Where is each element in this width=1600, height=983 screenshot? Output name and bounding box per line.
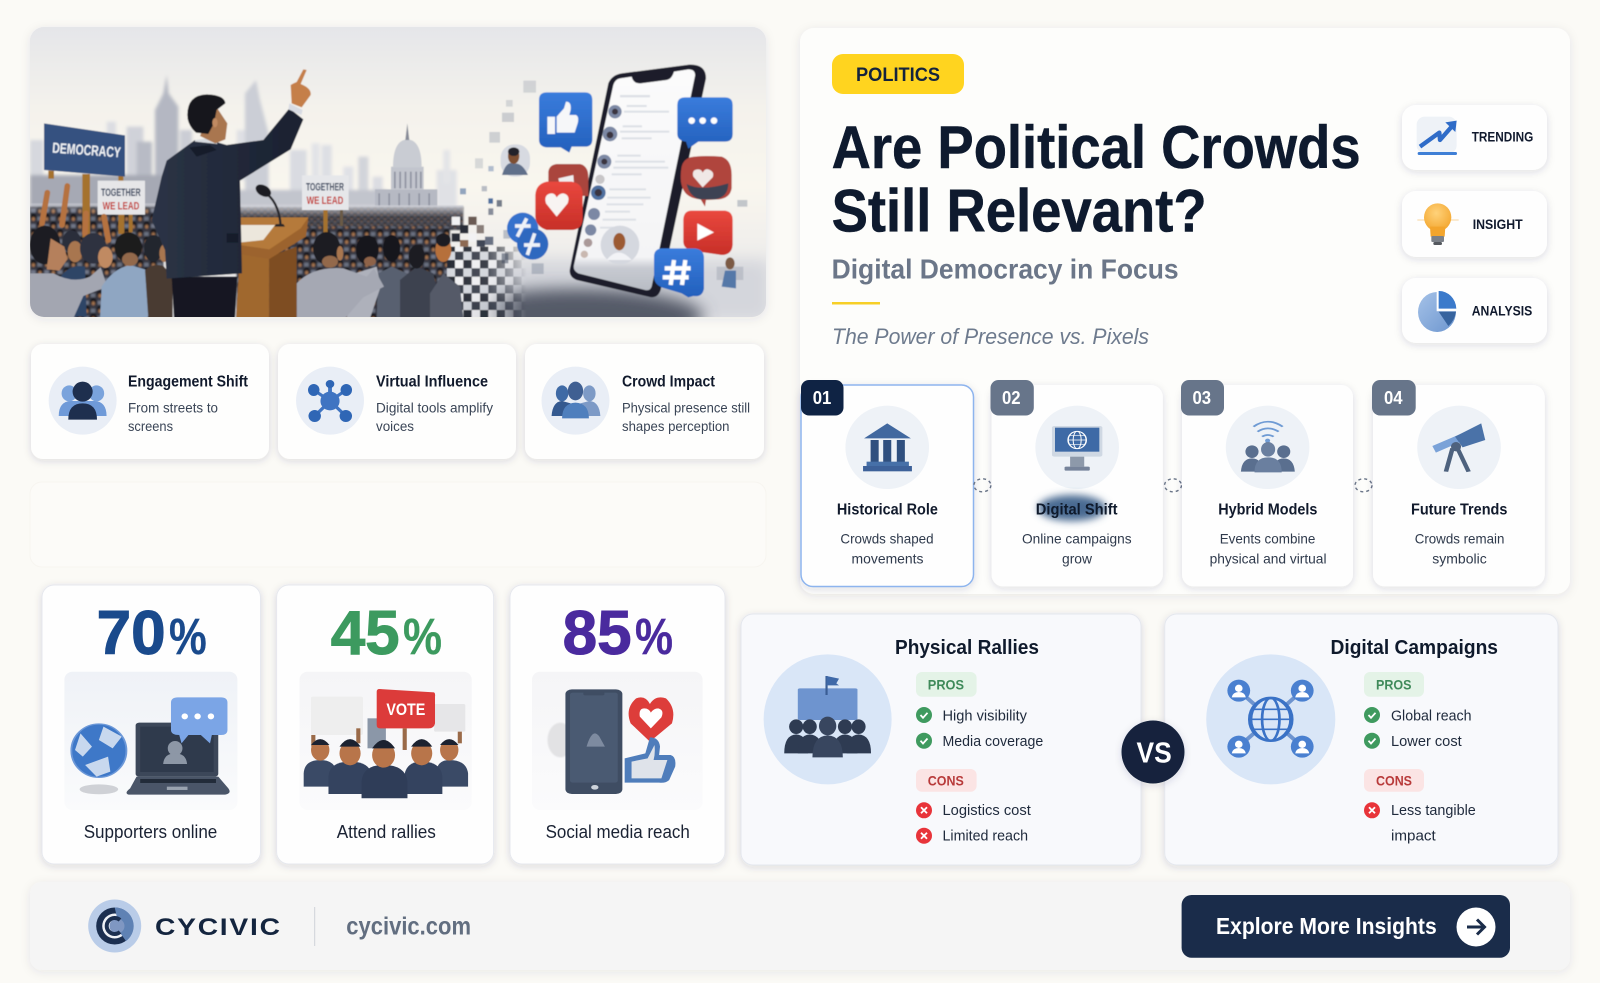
button: explore more insights: Explore More Insights [1216, 913, 1437, 939]
stat card: 85% social media reach [510, 585, 725, 864]
distant figure [717, 257, 743, 288]
info card: crowd impact: Physical presence still [622, 400, 750, 416]
social icon: avatar bubble [501, 144, 530, 177]
icon: connected audience [1226, 406, 1309, 489]
tagline: The Power of Presence vs. Pixels [832, 324, 1149, 349]
stat card: 85% social media reach: Social media reach [546, 822, 690, 842]
value [331, 599, 442, 668]
social icon: dim heart [681, 156, 732, 207]
raised arms [42, 186, 108, 240]
pros and cons list: High visibility [942, 708, 1027, 724]
placard: together we lead [98, 181, 145, 234]
step 1: historical role: Crowds shaped [840, 530, 934, 546]
icon: group [542, 367, 609, 435]
step 3: hybrid models [1181, 380, 1353, 586]
icon: telescope [1417, 406, 1501, 489]
speaker [152, 69, 311, 318]
comparison card: digital campaigns: Digital Campaigns [1330, 637, 1498, 659]
foreground crowd left [30, 226, 173, 318]
footer bar [30, 882, 1570, 970]
icon: light bulb [1417, 203, 1459, 245]
foreground crowd right [297, 232, 463, 318]
tag card: analysis [1402, 278, 1547, 343]
step 2: digital shift: grow [1062, 550, 1093, 566]
step 1: historical role: 01 [813, 388, 831, 408]
info card: crowd impact: shapes perception [622, 418, 730, 434]
panel: title and timeline [800, 28, 1570, 594]
step 2: digital shift: Digital Shift [1036, 502, 1118, 518]
button: explore more insights [1182, 895, 1510, 958]
connector [974, 479, 991, 492]
icon: monitor with globe [1035, 406, 1119, 489]
icon: pie chart [1418, 291, 1456, 332]
checker pixels [447, 247, 527, 320]
scattered pixels [460, 81, 747, 274]
placard: together we lead: TOGETHER [101, 187, 141, 199]
value: % [635, 608, 673, 665]
info card: crowd impact [525, 344, 764, 459]
placard: together we lead (right): TOGETHER [306, 182, 344, 194]
social icon: hearts [535, 164, 588, 230]
image: laptop and globe [64, 672, 237, 810]
info card: crowd impact: Crowd Impact [622, 374, 716, 390]
subtitle: Digital Democracy in Focus [832, 254, 1179, 284]
icon: people [49, 367, 117, 435]
social icon: play [683, 211, 733, 255]
logo mark [88, 900, 141, 952]
comparison card: physical rallies: Physical Rallies [895, 637, 1039, 659]
brand name: CYCIVIC [155, 914, 282, 941]
step 1: historical role: Historical Role [837, 502, 938, 518]
social icon: chat [677, 97, 733, 149]
pros and cons list: Logistics cost [942, 802, 1032, 819]
connector [1355, 479, 1372, 492]
info card: engagement shift [31, 344, 269, 459]
social icon: hash [654, 248, 704, 297]
value [563, 599, 673, 668]
phone [570, 65, 706, 297]
value: % [403, 608, 442, 665]
empty placeholder panel [30, 482, 766, 567]
step 2: digital shift: Online campaigns [1022, 530, 1132, 546]
step 2: digital shift [990, 380, 1163, 586]
hero illustration: speaker before crowd dissolving into phone and social icons [27, 23, 770, 345]
versus badge [1122, 720, 1184, 784]
pros and cons list [1364, 672, 1476, 845]
stat card: 45% attend rallies [277, 585, 494, 864]
comparison card: physical rallies [741, 614, 1141, 865]
value [97, 599, 207, 668]
pros and cons list: Media coverage [942, 733, 1043, 750]
icon: trending arrow [1417, 117, 1457, 155]
pros and cons list: CONS [928, 772, 964, 788]
pros and cons list: PROS [1376, 676, 1412, 692]
image: protesters with vote sign [300, 672, 472, 810]
info card: engagement shift: Engagement Shift [128, 374, 249, 390]
icon: network [296, 367, 364, 435]
info card: virtual influence: Digital tools amplify [376, 400, 493, 416]
placard: democracy: DEMOCRACY [52, 141, 121, 161]
pros and cons list: impact [1391, 828, 1437, 845]
step 4: future trends: 04 [1384, 388, 1403, 408]
image: protesters with vote sign: VOTE [386, 701, 425, 719]
pros and cons list: CONS [1376, 772, 1412, 788]
step 3: hybrid models: Hybrid Models [1218, 502, 1317, 518]
social icon: thumbs up [539, 92, 592, 153]
value: % [169, 608, 207, 665]
placard: democracy [44, 123, 125, 237]
step 1: historical role [801, 380, 974, 586]
stat card: 70% supporters online: Supporters online [84, 822, 217, 842]
step 4: future trends [1372, 380, 1545, 586]
tag card: trending [1402, 105, 1547, 170]
step 4: future trends: Future Trends [1411, 502, 1507, 518]
value: 85 [563, 599, 632, 668]
pros and cons list: Less tangible [1391, 802, 1476, 819]
right part of the hero [460, 65, 747, 297]
tag card: trending: TRENDING [1472, 130, 1533, 144]
info card: engagement shift: From streets to [128, 400, 218, 416]
step 4: future trends: Crowds remain [1415, 530, 1504, 546]
icon: institution [845, 406, 929, 489]
podium [236, 182, 308, 318]
pros and cons list: Global reach [1391, 708, 1472, 724]
tag card: insight: INSIGHT [1473, 217, 1523, 232]
city skyline [30, 75, 457, 215]
tag card: analysis: ANALYSIS [1472, 304, 1532, 318]
tag: politics [832, 54, 964, 94]
far and near crowd [30, 207, 463, 320]
tag: politics: POLITICS [856, 65, 940, 86]
info card: virtual influence [278, 344, 516, 459]
placard: together we lead (right): WE LEAD [307, 195, 344, 207]
info card: virtual influence: Virtual Influence [376, 374, 488, 390]
image: phone with reactions [532, 672, 703, 810]
stat card: 70% supporters online [42, 585, 260, 864]
title [832, 114, 1361, 244]
placard: together we lead: WE LEAD [103, 200, 140, 212]
step 3: hybrid models: 03 [1192, 388, 1211, 408]
step 2: digital shift: 02 [1002, 388, 1021, 408]
pros and cons list [916, 672, 1043, 845]
info card: virtual influence: voices [376, 418, 414, 434]
website: cycivic.com [346, 912, 471, 940]
stat card: 45% attend rallies: Attend rallies [337, 822, 436, 842]
step 1: historical role: movements [852, 550, 924, 566]
step 4: future trends: symbolic [1432, 550, 1487, 566]
icon: connected globe [1206, 654, 1335, 784]
info card: engagement shift: screens [128, 418, 173, 434]
value: 45 [331, 599, 400, 668]
versus badge: VS [1136, 738, 1172, 770]
title: Are Political Crowds [832, 114, 1361, 181]
social icon: blue share blobs [507, 213, 548, 260]
value: 70 [97, 599, 166, 668]
comparison card: digital campaigns [1165, 614, 1558, 865]
step 3: hybrid models: Events combine [1220, 530, 1316, 546]
pros and cons list: Limited reach [942, 828, 1028, 845]
icon: rally crowd [764, 654, 892, 784]
smudge [1038, 495, 1106, 521]
capitol [375, 123, 437, 210]
title: Still Relevant? [832, 178, 1207, 244]
ground [496, 256, 766, 317]
placard: together we lead (right) [302, 175, 349, 233]
pros and cons list: Lower cost [1391, 733, 1462, 750]
connector [1164, 479, 1182, 492]
pros and cons list: PROS [928, 676, 964, 692]
step 3: hybrid models: physical and virtual [1210, 550, 1326, 566]
tag card: insight [1402, 191, 1547, 257]
